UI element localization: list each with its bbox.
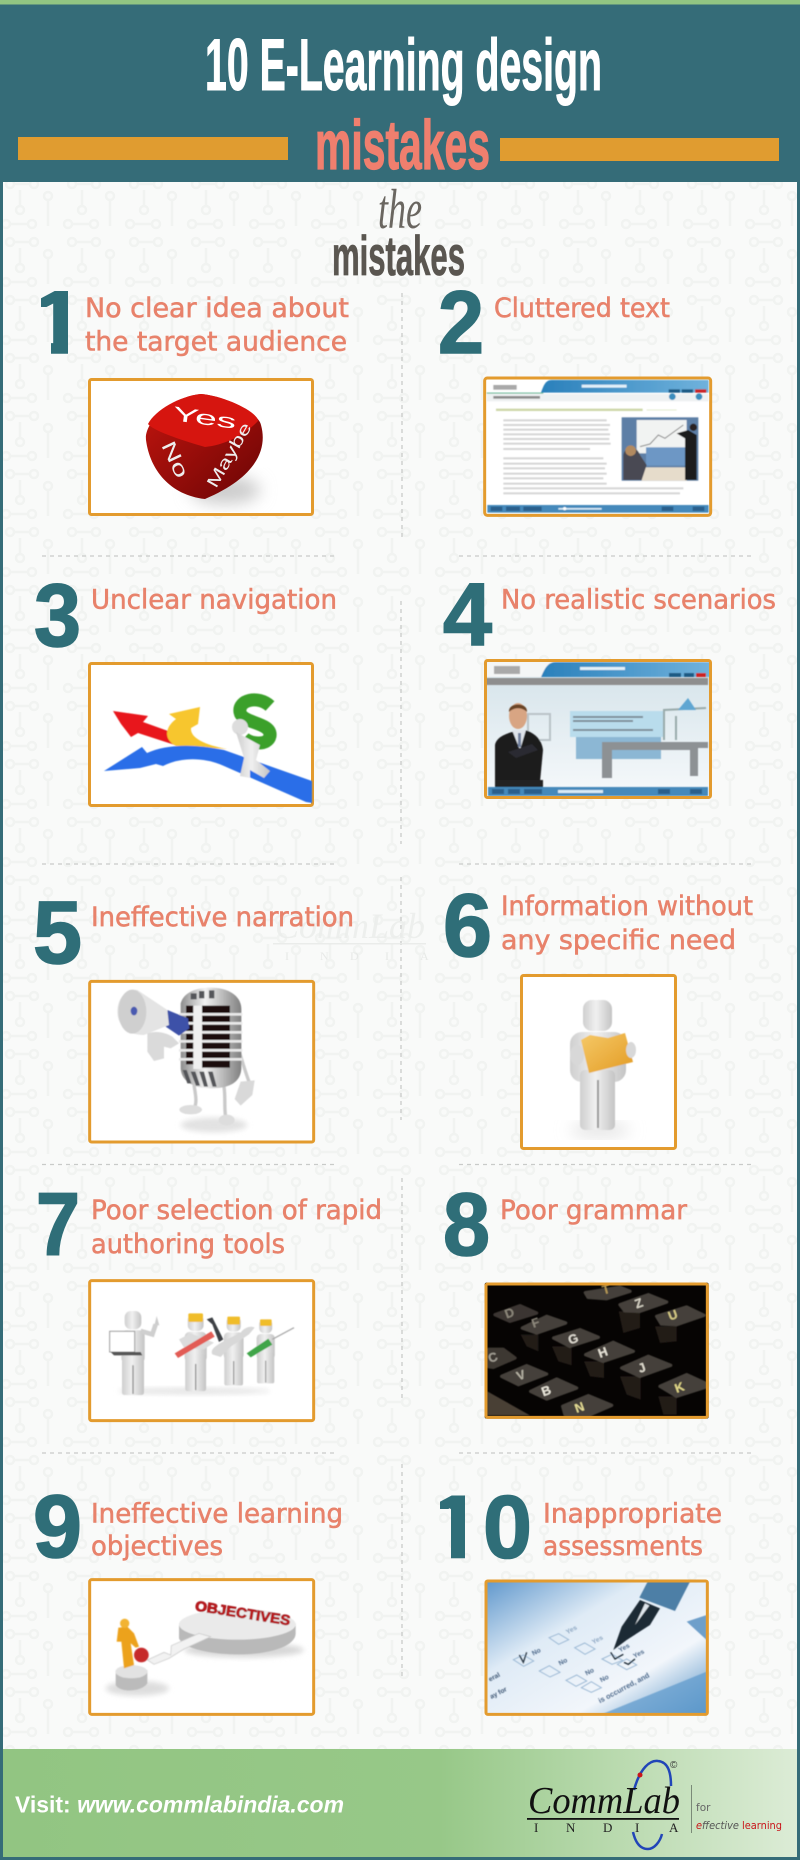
item 10 <box>440 1494 721 1716</box>
image: red dice: Maybe <box>203 419 255 491</box>
image: checklist and pen <box>486 1580 707 1715</box>
number 8: 8 <box>443 1174 490 1274</box>
image: typewriter keys: D <box>503 1305 516 1321</box>
image: checklist and pen: Yes <box>565 1624 579 1636</box>
image: typewriter keys: T <box>600 1282 612 1298</box>
label 5: Ineffective narration <box>91 902 354 933</box>
left orange bar <box>18 137 288 160</box>
footer <box>3 1749 797 1857</box>
image: typewriter keys: G <box>566 1331 580 1347</box>
CommLab logo: © <box>670 1760 678 1771</box>
image: checklist and pen: Yes <box>618 1642 631 1654</box>
item 7 <box>36 1174 382 1421</box>
image: typewriter keys: N <box>573 1400 586 1416</box>
image: typewriter keys <box>485 1282 709 1419</box>
image: checklist and pen: No <box>599 1674 610 1684</box>
image: typewriter keys: J <box>636 1360 648 1376</box>
label 1: No clear idea about <box>85 293 349 324</box>
label 1 <box>85 293 349 358</box>
image: checklist and pen: No <box>531 1647 542 1657</box>
watermark: CommLab <box>275 906 425 946</box>
number 10: 0 <box>483 1476 532 1576</box>
image: checklist and pen: No <box>558 1657 569 1667</box>
label 1: the target audience <box>85 326 347 358</box>
CommLab logo: INDIA <box>534 1820 679 1835</box>
section heading: the mistakes: mistakes <box>332 224 465 287</box>
image: figure with folder <box>522 976 676 1148</box>
number 10 <box>440 1494 530 1560</box>
section heading: the mistakes: the <box>378 179 422 241</box>
image: red dice: Yes <box>171 403 238 434</box>
image: typewriter keys: U <box>666 1307 680 1323</box>
image: cluttered slide <box>485 378 711 515</box>
watermark <box>273 906 429 963</box>
dividers <box>42 293 755 1678</box>
tagline <box>691 1785 782 1833</box>
item 6 <box>443 875 753 1148</box>
image: microphone with megaphone <box>90 981 314 1142</box>
label 10 <box>543 1498 722 1562</box>
subtitle: mistakes: mistakes <box>315 106 490 184</box>
item 1 <box>41 291 349 516</box>
item 2 <box>438 272 711 515</box>
item 4 <box>443 564 776 798</box>
label 8: Poor grammar <box>500 1195 687 1226</box>
image: checklist and pen: is occurred, and <box>597 1671 651 1705</box>
image: checklist and pen: Yes <box>632 1648 646 1660</box>
tagline: for <box>696 1802 711 1814</box>
image: typewriter keys: Z <box>633 1296 645 1311</box>
visit text: Visit: www.commlabindia.com <box>15 1792 344 1818</box>
number 7: 7 <box>36 1174 80 1274</box>
number 9: 9 <box>33 1476 82 1576</box>
item 3 <box>34 565 337 806</box>
label 6: any specific need <box>501 925 736 956</box>
label 6 <box>501 891 753 956</box>
CommLab logo <box>527 1760 680 1849</box>
image: checklist and pen: Yes <box>591 1634 605 1646</box>
image: typewriter keys: H <box>596 1345 610 1361</box>
image: typewriter keys: B <box>540 1383 553 1399</box>
CommLab logo: CommLab <box>528 1780 680 1822</box>
label 7: Poor selection of rapid <box>91 1195 382 1226</box>
image: crossroad arrows <box>90 664 312 806</box>
label 4: No realistic scenarios <box>501 585 776 616</box>
image: path to objectives: OBJECTIVES <box>194 1597 292 1628</box>
number 4: 4 <box>443 564 492 664</box>
label 10: Inappropriate <box>543 1498 722 1530</box>
label 7: authoring tools <box>91 1229 285 1260</box>
number 3: 3 <box>34 565 81 665</box>
tagline: effective learning <box>696 1820 782 1832</box>
item 5 <box>33 882 354 1142</box>
number 10: 1 <box>426 1476 486 1576</box>
item 8 <box>443 1174 709 1419</box>
image: path to objectives <box>90 1580 314 1714</box>
label 9: Ineffective learning <box>91 1498 343 1530</box>
item 9 <box>33 1476 343 1714</box>
image: typewriter keys: K <box>673 1379 687 1396</box>
number 6: 6 <box>443 875 492 975</box>
label 6: Information without <box>501 891 753 922</box>
label 3: Unclear navigation <box>91 585 337 616</box>
image: scenario slide <box>486 660 710 798</box>
number 1: 1 <box>29 272 89 372</box>
image: typewriter keys: F <box>530 1315 542 1331</box>
number 5: 5 <box>33 882 82 982</box>
label 9: objectives <box>91 1531 223 1562</box>
header banner <box>0 0 800 184</box>
image: checklist and pen: eral <box>488 1672 502 1683</box>
watermark: INDIA <box>285 949 429 963</box>
image: checklist and pen: No <box>584 1667 595 1677</box>
label 7 <box>91 1195 382 1260</box>
image: checklist and pen: ay for <box>489 1686 509 1701</box>
right orange bar <box>500 138 779 161</box>
section heading: the mistakes <box>332 179 465 287</box>
label 10: assessments <box>543 1531 703 1562</box>
image: figures with tools <box>90 1281 314 1421</box>
number 2: 2 <box>438 272 484 372</box>
label 9 <box>91 1498 343 1562</box>
image: red dice: No <box>156 438 192 482</box>
image: typewriter keys: C <box>486 1350 500 1366</box>
label 2: Cluttered text <box>494 293 670 324</box>
image: typewriter keys: V <box>515 1367 528 1383</box>
image: red dice <box>90 380 312 514</box>
